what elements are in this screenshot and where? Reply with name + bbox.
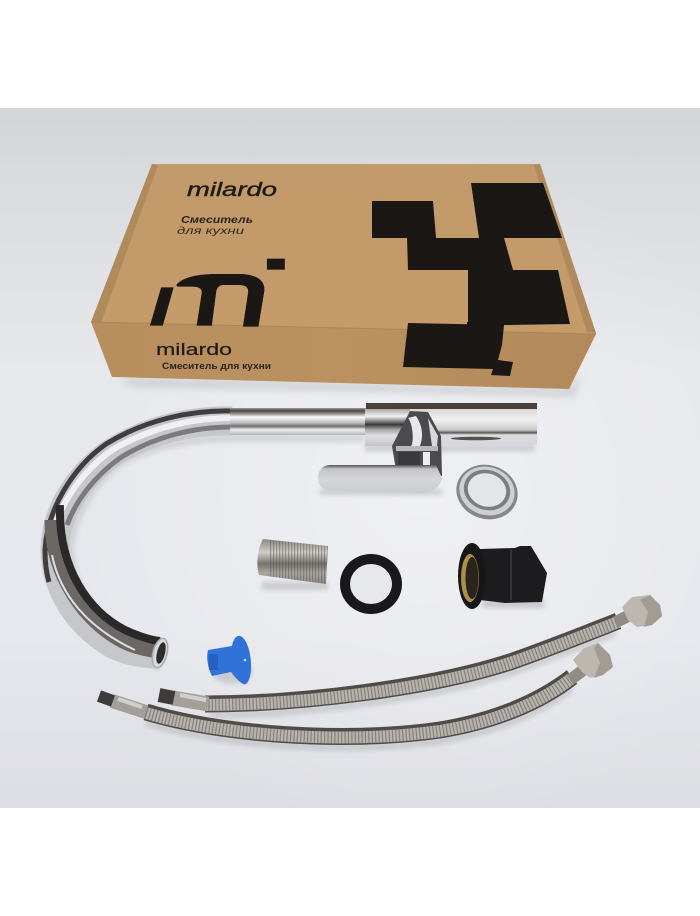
hose connector metal [173, 698, 208, 704]
fitting shadow [482, 600, 544, 608]
black pixel pattern on top [372, 183, 570, 330]
black plastic fitting [458, 543, 547, 609]
lever handle [318, 465, 442, 493]
slot reflection [451, 437, 501, 440]
tube bright reflection [54, 418, 232, 530]
cylinder collar [365, 409, 410, 446]
curved chrome tube [55, 421, 232, 654]
brass insert [461, 554, 479, 602]
tube mid reflection [67, 427, 232, 525]
hose connector tip [99, 696, 113, 701]
black pattern on front [403, 323, 513, 376]
threaded sleeve [257, 539, 328, 590]
product label on top: Смеситель [181, 214, 253, 226]
lever shadow [320, 489, 442, 495]
hose braid [205, 621, 618, 704]
backdrop glow [0, 108, 700, 808]
hose connector metal [112, 701, 146, 712]
logo dot [267, 259, 285, 270]
cardboard box [91, 164, 596, 396]
fitting flange [458, 543, 486, 609]
hose nut neck [616, 615, 630, 622]
hose shadow [210, 633, 615, 715]
logo mark m [150, 259, 285, 327]
photo backdrop [0, 108, 700, 808]
spout shadow [70, 438, 365, 668]
neck highlights [408, 416, 422, 446]
tube lower gray band [52, 520, 160, 651]
tube lower highlight [52, 555, 135, 650]
sleeve shadow [262, 582, 328, 590]
brand name on front: milardo [156, 340, 232, 359]
tube outer dark reflection [45, 411, 232, 582]
blue aerator key [207, 636, 252, 684]
product label on front: Смеситель для кухни [162, 361, 271, 371]
hose shadow [146, 689, 572, 747]
vertical neck [392, 411, 442, 476]
key shadow [212, 660, 252, 684]
hose braid [146, 677, 572, 736]
hose nut neck [570, 668, 586, 680]
upper braided hose [159, 595, 662, 715]
straight tube [230, 408, 367, 435]
box front edge [91, 322, 596, 334]
hose connector tip [159, 695, 174, 698]
left flap [91, 164, 158, 323]
rubber washer [340, 554, 402, 614]
hose hex nut [573, 643, 613, 678]
spout mouth [150, 637, 170, 669]
box front face [91, 322, 596, 389]
tube lower dark reflection [60, 505, 160, 641]
right flap [534, 164, 596, 333]
faucet spout [45, 408, 367, 669]
faucet body [318, 403, 537, 495]
body shadow [365, 444, 535, 452]
cylinder right section [400, 409, 537, 445]
box shadow [120, 372, 580, 396]
box top face [91, 164, 596, 334]
product sublabel on top: для кухни [177, 225, 244, 237]
lower braided hose [99, 643, 613, 747]
fitting body [480, 546, 547, 603]
chrome ring [449, 457, 525, 527]
cylinder top dark band [366, 403, 537, 409]
brand name on top: milardo [187, 180, 277, 201]
hose hex nut [622, 595, 662, 627]
